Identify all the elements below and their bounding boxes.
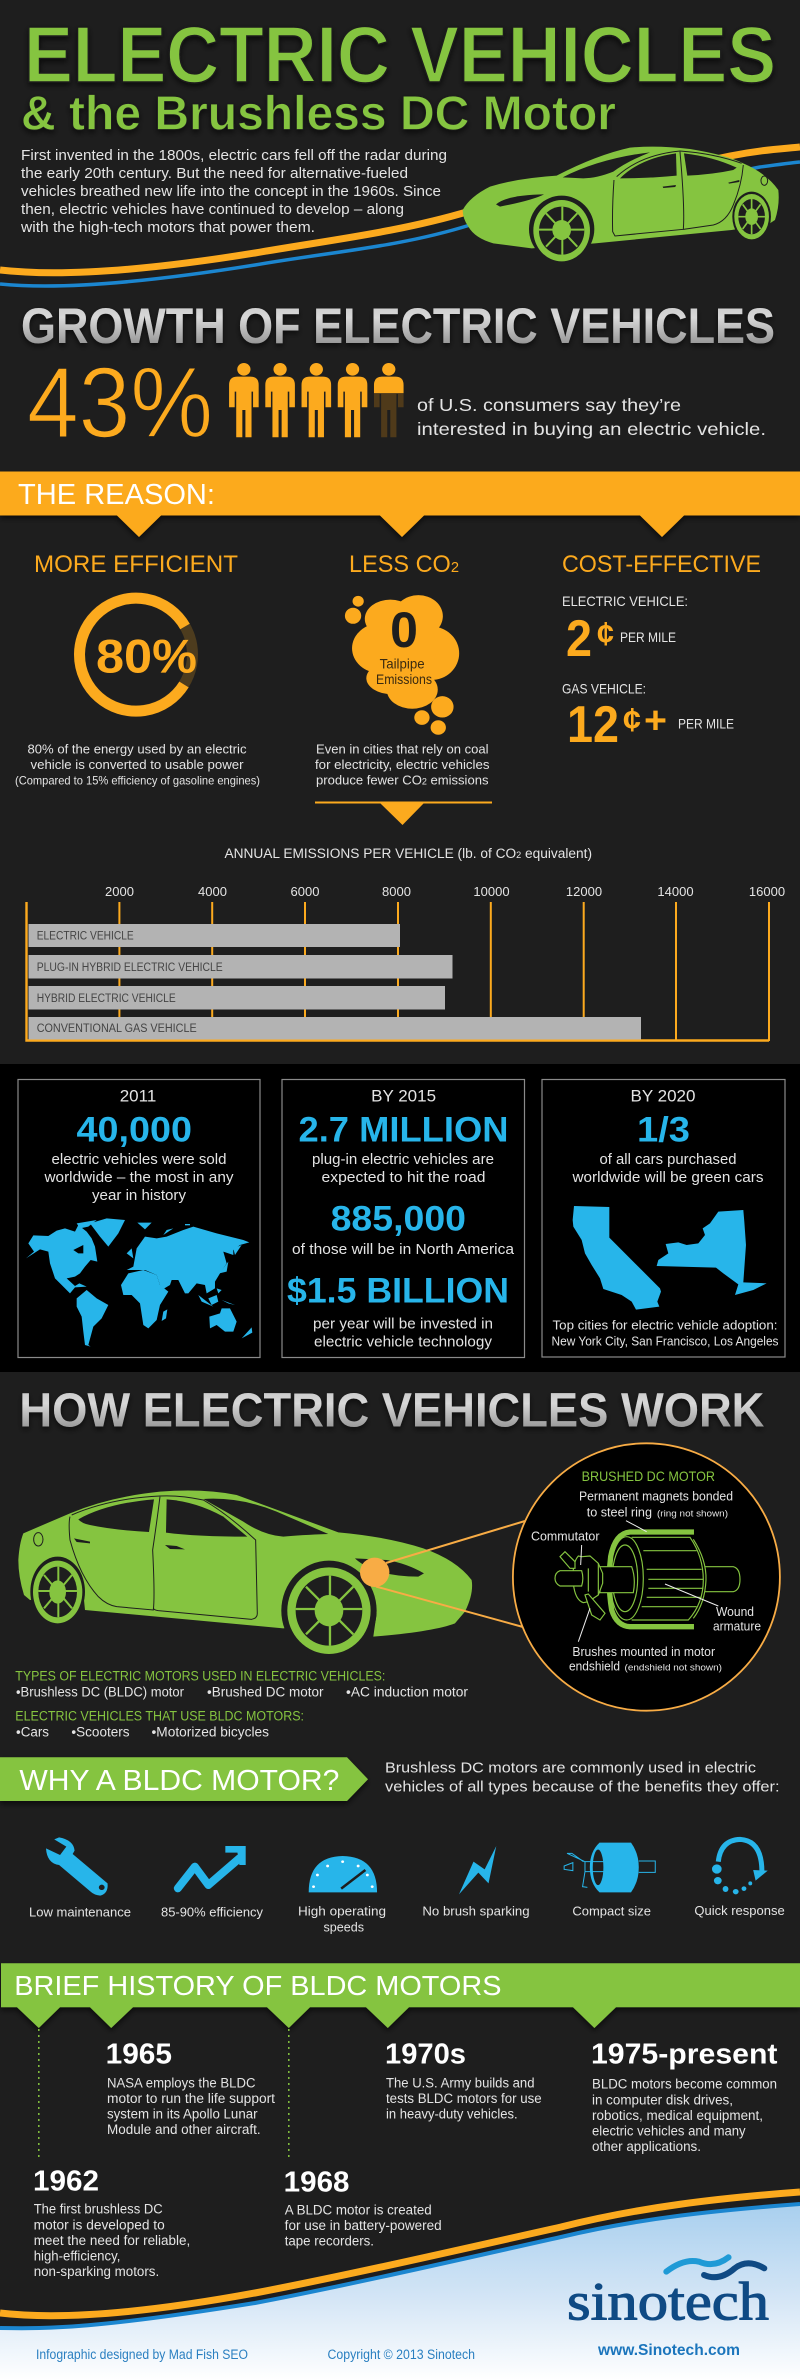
- icon labels: High operating: [298, 1904, 386, 1919]
- intro paragraph: the early 20th century. But the need for alternative-fueled: [21, 166, 408, 182]
- bar labels: PLUG-IN HYBRID ELECTRIC VEHICLE: [37, 962, 223, 974]
- icon: compact motor: [564, 1843, 655, 1892]
- text block: motor types: •Cars: [16, 1725, 49, 1740]
- timeline entry: 1975-present: robotics, medical equipment,: [592, 2108, 763, 2123]
- panel: by 2015: of those will be in North America: [292, 1242, 515, 1258]
- text block: BLDC benefits intro: vehicles of all types because of the benefits they offer:: [385, 1779, 780, 1796]
- timeline entry: 1965: motor to run the life support: [107, 2091, 275, 2106]
- icon labels: No brush sparking: [422, 1904, 530, 1919]
- text block: BLDC benefits intro: Brushless DC motors are commonly used in electric: [385, 1760, 757, 1777]
- panel: less CO2: for electricity, electric vehicles: [315, 757, 490, 772]
- panel: less CO2: LESS CO2: [349, 551, 459, 578]
- header swoosh lines: [0, 147, 800, 286]
- stat description: interested in buying an electric vehicle.: [417, 419, 766, 439]
- icon labels: Compact size: [572, 1904, 651, 1919]
- bar labels: HYBRID ELECTRIC VEHICLE: [37, 993, 176, 1005]
- footer background: [0, 2204, 800, 2380]
- panel: less CO2: [315, 551, 490, 788]
- axis labels: 4000: [198, 884, 227, 899]
- icon: quick response: [712, 1839, 768, 1894]
- panel: 2011: electric vehicles were sold: [52, 1152, 226, 1168]
- panel: cost-effective: GAS VEHICLE:: [562, 680, 646, 696]
- icon labels: speeds: [324, 1919, 364, 1934]
- timeline entry: 1970s: in heavy-duty vehicles.: [386, 2107, 518, 2122]
- panel: by 2015: [282, 1080, 524, 1358]
- text block: motor types: •AC induction motor: [346, 1685, 469, 1700]
- axis labels: 14000: [657, 884, 694, 899]
- banner: the reason: THE REASON:: [18, 479, 215, 511]
- axis labels: 16000: [749, 884, 785, 899]
- timeline entry: 1975-present: [591, 2038, 778, 2154]
- text block: motor types: •Motorized bicycles: [152, 1725, 269, 1740]
- icon labels: Low maintenance: [29, 1905, 131, 1920]
- panel: by 2015: 885,000: [331, 1199, 466, 1238]
- panel: cost-effective: PER MILE: [620, 629, 676, 645]
- callout: motor location: [360, 1521, 525, 1627]
- panel: by 2020: Top cities for electric vehicle adoption:: [552, 1317, 778, 1332]
- panel: by 2020: worldwide will be green cars: [571, 1170, 764, 1186]
- panel: more efficient: (Compared to 15% efficiency of gasoline engines): [15, 774, 260, 788]
- bar labels: CONVENTIONAL GAS VEHICLE: [37, 1023, 197, 1035]
- timeline entry: 1962: meet the need for reliable,: [34, 2233, 190, 2248]
- logo: sinotech: sinotech: [567, 2271, 769, 2331]
- panel: by 2020: [542, 1080, 785, 1357]
- icon: lightning bolt: [459, 1846, 496, 1894]
- axis labels: 12000: [566, 884, 602, 899]
- footer swoosh: [0, 2192, 800, 2328]
- motor labels: (endshield not shown): [624, 1663, 722, 1674]
- intro paragraph: [20, 148, 447, 236]
- panel: cost-effective: 12: [567, 696, 619, 754]
- credit: Infographic designed by Mad Fish SEO: [36, 2347, 248, 2362]
- icon: green car with motor callout: [18, 1491, 472, 1661]
- panel: cost-effective: ¢: [623, 701, 641, 738]
- intro paragraph: First invented in the 1800s, electric cars fell off the radar during: [21, 148, 447, 164]
- panel: by 2015: $1.5 BILLION: [287, 1272, 509, 1311]
- chart: 80 percent ring: 80%: [96, 629, 197, 682]
- banner: the reason: [0, 472, 800, 537]
- logo: sinotech: [567, 2257, 769, 2359]
- timeline entry: 1968: A BLDC motor is created: [285, 2202, 432, 2217]
- timeline entry: 1962: 1962: [33, 2166, 99, 2198]
- motor labels: (ring not shown): [657, 1509, 728, 1520]
- text block: motor types: [15, 1669, 469, 1740]
- intro paragraph: with the high-tech motors that power them.: [20, 220, 315, 236]
- timeline entry: 1970s: The U.S. Army builds and: [386, 2075, 534, 2090]
- text block: motor types: •Brushed DC motor: [207, 1685, 324, 1700]
- copyright: Copyright © 2013 Sinotech: [328, 2347, 475, 2362]
- panel: more efficient: MORE EFFICIENT: [34, 551, 238, 578]
- icon: green car in header: [463, 147, 779, 262]
- panel: cost-effective: [562, 551, 761, 754]
- banner: why a BLDC motor: [0, 1757, 368, 1801]
- subtitle: & the Brushless DC Motor: [21, 88, 616, 140]
- motor labels: [531, 1468, 761, 1674]
- timeline entry: 1965: system in its Apollo Lunar: [107, 2107, 258, 2122]
- timeline entry: 1970s: 1970s: [385, 2038, 466, 2070]
- intro paragraph: vehicles breathed new life into the concept in the 1960s. Since: [21, 184, 441, 200]
- text block: motor types: ELECTRIC VEHICLES THAT USE BLDC MOTORS:: [15, 1709, 304, 1724]
- panel: cost-effective: ELECTRIC VEHICLE:: [562, 593, 688, 609]
- panel: 2011: 40,000: [76, 1111, 192, 1150]
- panel: by 2015: per year will be invested in: [313, 1316, 493, 1332]
- banner: why a BLDC motor: WHY A BLDC MOTOR?: [19, 1765, 339, 1797]
- panel: cost-effective: +: [644, 700, 667, 742]
- panel: less CO2: Tailpipe: [380, 656, 425, 672]
- panel band: forecast: [0, 1064, 800, 1372]
- panel: less CO2: Emissions: [376, 671, 432, 687]
- panel: by 2015: plug-in electric vehicles are: [312, 1152, 494, 1168]
- bar chart: annual emissions: [26, 846, 785, 1041]
- panel: by 2015: expected to hit the road: [322, 1170, 486, 1186]
- panel: by 2015: 2.7 MILLION: [298, 1111, 508, 1150]
- axis labels: [105, 884, 785, 899]
- timeline entry: 1968: tape recorders.: [285, 2234, 374, 2249]
- timeline entry: 1962: non-sparking motors.: [34, 2264, 159, 2279]
- timeline dotted connectors: [39, 2029, 289, 2160]
- arrow: down to chart: [315, 802, 492, 825]
- axis labels: 8000: [382, 884, 411, 899]
- chart: 80 percent ring: [80, 598, 197, 711]
- icon labels: Quick response: [694, 1903, 785, 1918]
- timeline entry: 1968: 1968: [284, 2167, 350, 2199]
- panel: 2011: 2011: [120, 1087, 156, 1106]
- icon: row of five people: [229, 363, 404, 437]
- timeline entry: 1970s: [385, 2038, 542, 2122]
- panel: less CO2: Even in cities that rely on coal: [316, 742, 489, 756]
- timeline entry: 1975-present: 1975-present: [591, 2038, 778, 2070]
- panel: cost-effective: 2: [566, 610, 592, 668]
- panel: by 2020: 1/3: [637, 1111, 690, 1150]
- timeline entry: 1975-present: electric vehicles and many: [592, 2123, 746, 2138]
- text block: motor types: •Brushless DC (BLDC) motor: [16, 1685, 184, 1700]
- timeline entry: 1975-present: other applications.: [592, 2139, 701, 2154]
- motor labels: to steel ring: [587, 1505, 652, 1520]
- timeline entry: 1968: [284, 2167, 442, 2249]
- motor labels: armature: [713, 1619, 761, 1634]
- icon: wrench: [46, 1837, 108, 1896]
- icon: speedometer: [309, 1856, 377, 1892]
- timeline entry: 1965: Module and other aircraft.: [107, 2122, 261, 2137]
- panel: by 2020: of all cars purchased: [600, 1152, 736, 1168]
- panel: 2011: [18, 1080, 260, 1358]
- panel: by 2015: BY 2015: [371, 1087, 436, 1106]
- timeline entry: 1965: NASA employs the BLDC: [107, 2075, 256, 2090]
- timeline entry: 1962: motor is developed to: [34, 2217, 165, 2232]
- intro paragraph: then, electric vehicles have continued to develop – along: [21, 202, 404, 218]
- timeline entry: 1975-present: BLDC motors become common: [592, 2077, 777, 2092]
- panel: less CO2: 0: [390, 602, 418, 658]
- panel: by 2020: New York City, San Francisco, Los Angeles: [552, 1334, 779, 1349]
- bar labels: [37, 930, 223, 1035]
- timeline entry: 1962: [33, 2166, 190, 2279]
- panel: brushed DC motor diagram: [513, 1443, 780, 1711]
- panel: by 2020: BY 2020: [631, 1087, 695, 1106]
- chart title: ANNUAL EMISSIONS PER VEHICLE (lb. of CO 2 equivalent): [224, 846, 592, 861]
- panel: 2011: year in history: [92, 1188, 187, 1204]
- panel: by 2015: electric vehicle technology: [314, 1335, 493, 1351]
- bar labels: ELECTRIC VEHICLE: [37, 930, 134, 942]
- axis labels: 10000: [473, 884, 510, 899]
- bars: [28, 924, 641, 1040]
- icon: rising arrow: [178, 1846, 246, 1888]
- panel: more efficient: [15, 551, 260, 788]
- panel: more efficient: vehicle is converted to usable power: [30, 757, 244, 772]
- icon: motor drawing: [555, 1532, 740, 1627]
- banner: brief history: BRIEF HISTORY OF BLDC MOTORS: [14, 1970, 502, 2001]
- stat description: of U.S. consumers say they’re: [417, 395, 681, 415]
- motor labels: Commutator: [531, 1529, 600, 1544]
- text block: motor types: •Scooters: [71, 1725, 130, 1740]
- axis labels: 2000: [105, 884, 134, 899]
- banner: brief history: [1, 1963, 800, 2028]
- text block: BLDC benefits intro: [385, 1760, 780, 1796]
- timeline entry: 1965: [106, 2038, 275, 2137]
- icon row: benefits: [29, 1837, 785, 1934]
- panel: cost-effective: ¢: [597, 615, 614, 652]
- panel: 2011: worldwide – the most in any: [43, 1170, 234, 1186]
- motor labels: Permanent magnets bonded: [579, 1489, 733, 1504]
- panel: less CO2: produce fewer CO2 emissions: [316, 772, 489, 788]
- timeline entry: 1975-present: in computer disk drives,: [592, 2092, 733, 2107]
- panel: more efficient: 80% of the energy used by an electric: [28, 742, 247, 756]
- timeline entry: 1962: high-efficiency,: [34, 2248, 120, 2263]
- timeline entry: 1970s: tests BLDC motors for use: [386, 2091, 542, 2106]
- motor labels: endshield: [569, 1659, 620, 1674]
- icon: exhaust cloud: [345, 595, 459, 735]
- icon: world map: [26, 1218, 252, 1347]
- stat: 43%: 43%: [27, 347, 213, 459]
- timeline entry: 1962: The first brushless DC: [34, 2201, 163, 2216]
- timeline entry: 1965: 1965: [106, 2038, 172, 2070]
- motor labels: Wound: [716, 1604, 754, 1619]
- motor labels: BRUSHED DC MOTOR: [582, 1468, 715, 1484]
- axis labels: 6000: [291, 884, 319, 899]
- icon: California and New York: [573, 1206, 767, 1310]
- icon labels: 85-90% efficiency: [161, 1905, 263, 1920]
- website link: www.Sinotech.com: [597, 2342, 740, 2359]
- text block: motor types: TYPES OF ELECTRIC MOTORS USED IN ELECTRIC VEHICLES:: [15, 1669, 385, 1684]
- panel: cost-effective: PER MILE: [678, 716, 734, 732]
- motor labels: Brushes mounted in motor: [572, 1644, 716, 1659]
- heading: how electric vehicles work: HOW ELECTRIC VEHICLES WORK: [19, 1385, 765, 1438]
- timeline entry: 1968: for use in battery-powered: [285, 2218, 442, 2233]
- panel: cost-effective: COST-EFFECTIVE: [562, 551, 761, 578]
- stat description: [417, 395, 766, 439]
- icon labels: [29, 1903, 785, 1934]
